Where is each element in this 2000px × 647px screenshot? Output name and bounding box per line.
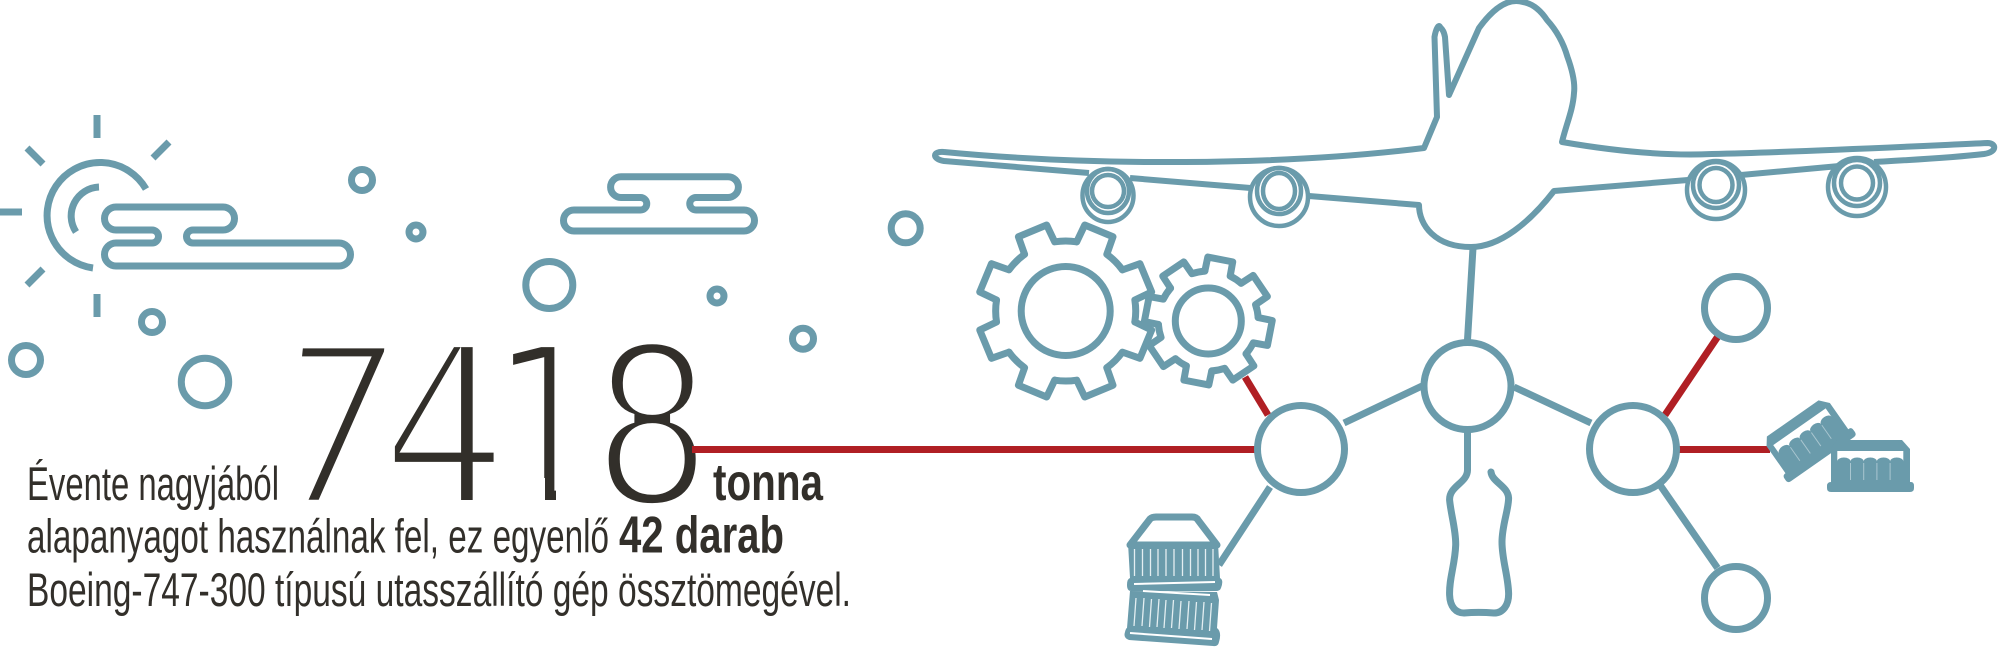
lower container slits [1134,598,1212,631]
line 2: alapanyagot használnak fel, ez egyenlő [27,510,609,563]
icon: plastic bottle [1450,432,1509,613]
sun arcs [47,162,146,268]
cloud [105,207,351,266]
engines [1082,158,1886,226]
lower container wedge and rim slit [1130,591,1212,639]
big number 7418: 7 [260,300,410,558]
network nodes [1258,276,1768,630]
icon: airplane [935,1,1994,247]
red connector from number to network [692,446,1258,453]
bold: 42 darab: 42 darab [619,507,784,565]
container lid [1130,517,1217,545]
large gear [952,197,1180,425]
network connector lines [1219,248,1770,568]
sun rays [0,115,169,317]
big number 7418: 1 [490,299,603,558]
red connectors to right nodes [1665,337,1770,450]
upper container body [1127,543,1222,591]
red connector to gears [1245,377,1268,415]
decorative bubbles [12,170,920,406]
fuselage and wings [935,1,1994,247]
icon: second cloud [564,177,755,231]
big number 7418: 8 [592,298,712,557]
icon: toothbrush heads [1759,394,1914,492]
line 3: Boeing-747-300 típusú utasszállító gép össztömegével. [27,563,851,616]
icon: gears [952,197,1282,425]
big number 7418 [260,298,712,558]
unit: tonna: tonna [713,454,824,512]
rotated brush head [1759,394,1857,483]
big number 7418: 4 [381,298,509,557]
line 1: Évente nagyjából [27,457,279,510]
teal connectors [1219,248,1718,568]
icon: stacked containers [1124,517,1222,646]
upper container rim slit [1134,582,1215,584]
lower container body [1124,591,1220,646]
small gear [1135,247,1282,395]
icon: sun behind cloud [0,115,350,317]
text block: description [27,454,851,616]
upright brush head [1827,440,1914,492]
upper container slits [1134,549,1213,576]
